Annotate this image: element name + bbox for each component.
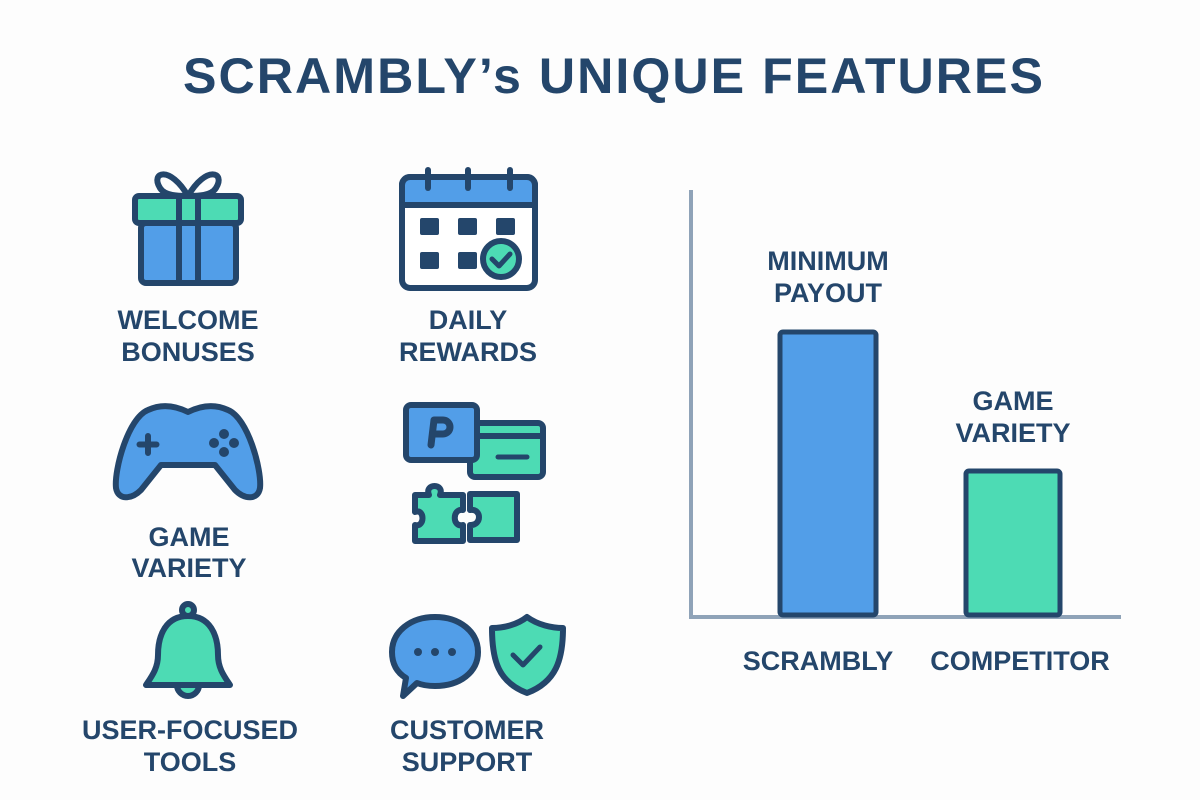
icon: gift [135,174,241,283]
icon: chat bubble [392,617,478,696]
axis labels: SCRAMBLY [743,646,893,676]
title: SCRAMBLY’s UNIQUE FEATURES [183,48,1045,104]
label: customer support [390,715,544,777]
label: customer support: SUPPORT [402,747,533,777]
icon: game controller [116,406,260,497]
axis labels: COMPETITOR [930,646,1110,676]
bar label: minimum payout: PAYOUT [774,278,883,308]
label: game variety [131,522,247,583]
label: daily rewards: REWARDS [399,337,537,367]
icon: shield [492,617,563,693]
bar: competitor [966,471,1060,615]
bar label: game variety [955,386,1071,448]
bar label: minimum payout: MINIMUM [767,246,889,276]
label: user-focused tools [82,715,298,777]
feature: welcome bonuses [116,170,563,696]
label: user-focused tools: USER-FOCUSED [82,715,298,745]
bar chart [689,190,1121,676]
axes [689,190,1121,617]
label: welcome bonuses: BONUSES [121,337,255,367]
label: game variety: VARIETY [131,553,247,583]
label: user-focused tools: TOOLS [144,747,236,777]
icon: bell [146,604,230,696]
label: welcome bonuses [118,305,258,367]
label: game variety: GAME [148,522,230,552]
bar: scrambly [780,332,876,615]
label: welcome bonuses: WELCOME [118,305,258,335]
axis labels [743,646,1110,676]
bar label: minimum payout [767,246,889,308]
label: daily rewards: DAILY [429,305,507,335]
bar label: game variety: VARIETY [955,418,1071,448]
icon: payment methods [406,405,543,541]
bar label: game variety: GAME [972,386,1054,416]
icon: calendar [402,170,535,288]
label: customer support: CUSTOMER [390,715,544,745]
label: daily rewards [399,305,537,367]
